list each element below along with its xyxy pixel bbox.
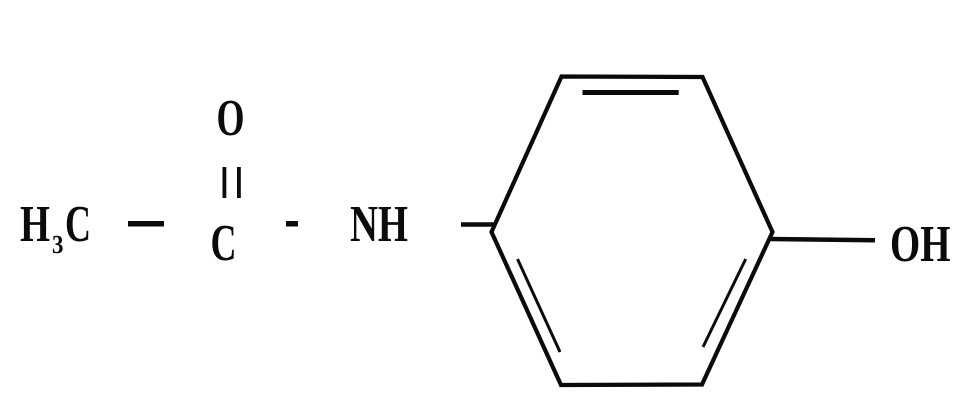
label: OH hydroxyl group: OH xyxy=(890,216,950,273)
label: H3C methyl group: H xyxy=(20,196,50,253)
ring outline xyxy=(492,76,772,385)
label: H3C methyl group: 3 xyxy=(52,230,64,259)
label: carbonyl carbon: C xyxy=(210,215,236,272)
bond: ring to hydroxyl xyxy=(770,239,875,240)
benzene ring xyxy=(492,76,772,385)
ring inner double bond: lower right xyxy=(703,259,746,347)
ring inner double bond: top xyxy=(582,90,679,95)
label: H3C methyl group xyxy=(20,196,91,259)
ring inner double bond: lower left xyxy=(518,259,560,352)
bond: methyl to carbonyl carbon xyxy=(128,221,164,226)
label: NH amine group: NH xyxy=(350,196,408,253)
bond: amine to ring xyxy=(461,222,494,227)
bond: carbonyl double bond xyxy=(222,167,241,198)
label: carbonyl oxygen: O xyxy=(216,90,244,147)
bond: carbonyl carbon to amine xyxy=(286,221,298,226)
label: H3C methyl group: C xyxy=(65,196,91,253)
